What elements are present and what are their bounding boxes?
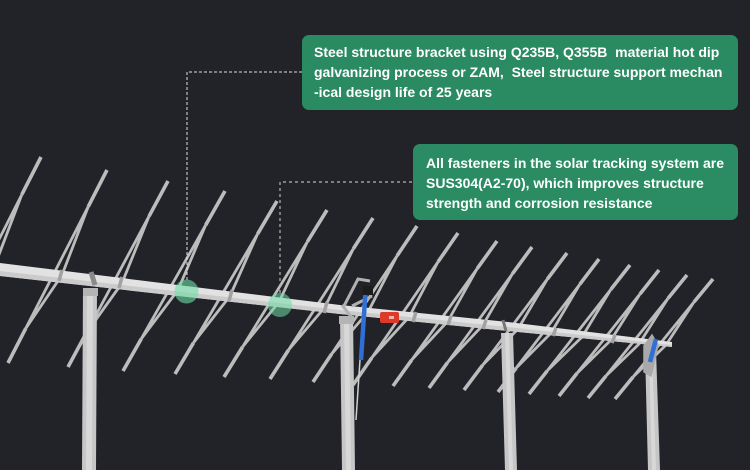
leader line 1 xyxy=(187,72,520,280)
callout: fasteners: All fasteners in the solar tracking system are SUS304(A2-70), which improves structure strength and corrosion resistance xyxy=(426,155,724,211)
bearing bracket post 4 xyxy=(644,335,658,376)
marker circle 2 xyxy=(268,293,292,317)
red control box xyxy=(380,312,399,323)
black motor cap xyxy=(363,286,373,295)
blue actuator right xyxy=(650,339,656,362)
callout: steel structure bracket xyxy=(302,35,738,110)
post 3 xyxy=(501,333,517,470)
bearing bracket post 2 xyxy=(342,279,372,318)
callout: fasteners xyxy=(413,144,738,220)
post 1 xyxy=(82,288,98,470)
blue actuator left xyxy=(361,292,366,360)
support posts xyxy=(82,288,660,470)
leader line 2 xyxy=(280,182,413,293)
post 2 xyxy=(339,316,355,470)
callout: steel structure bracket: Steel structure bracket using Q235B, Q355B material hot dip galvanizing process or ZAM, Steel structure support mechan -ical design life of 25 years xyxy=(314,44,722,100)
purlin trusses xyxy=(0,157,713,399)
beam clamps xyxy=(59,270,615,343)
thin strut xyxy=(356,360,360,420)
torque tube beam xyxy=(0,263,672,347)
post 4 xyxy=(645,350,660,470)
marker circle 1 xyxy=(174,280,198,304)
